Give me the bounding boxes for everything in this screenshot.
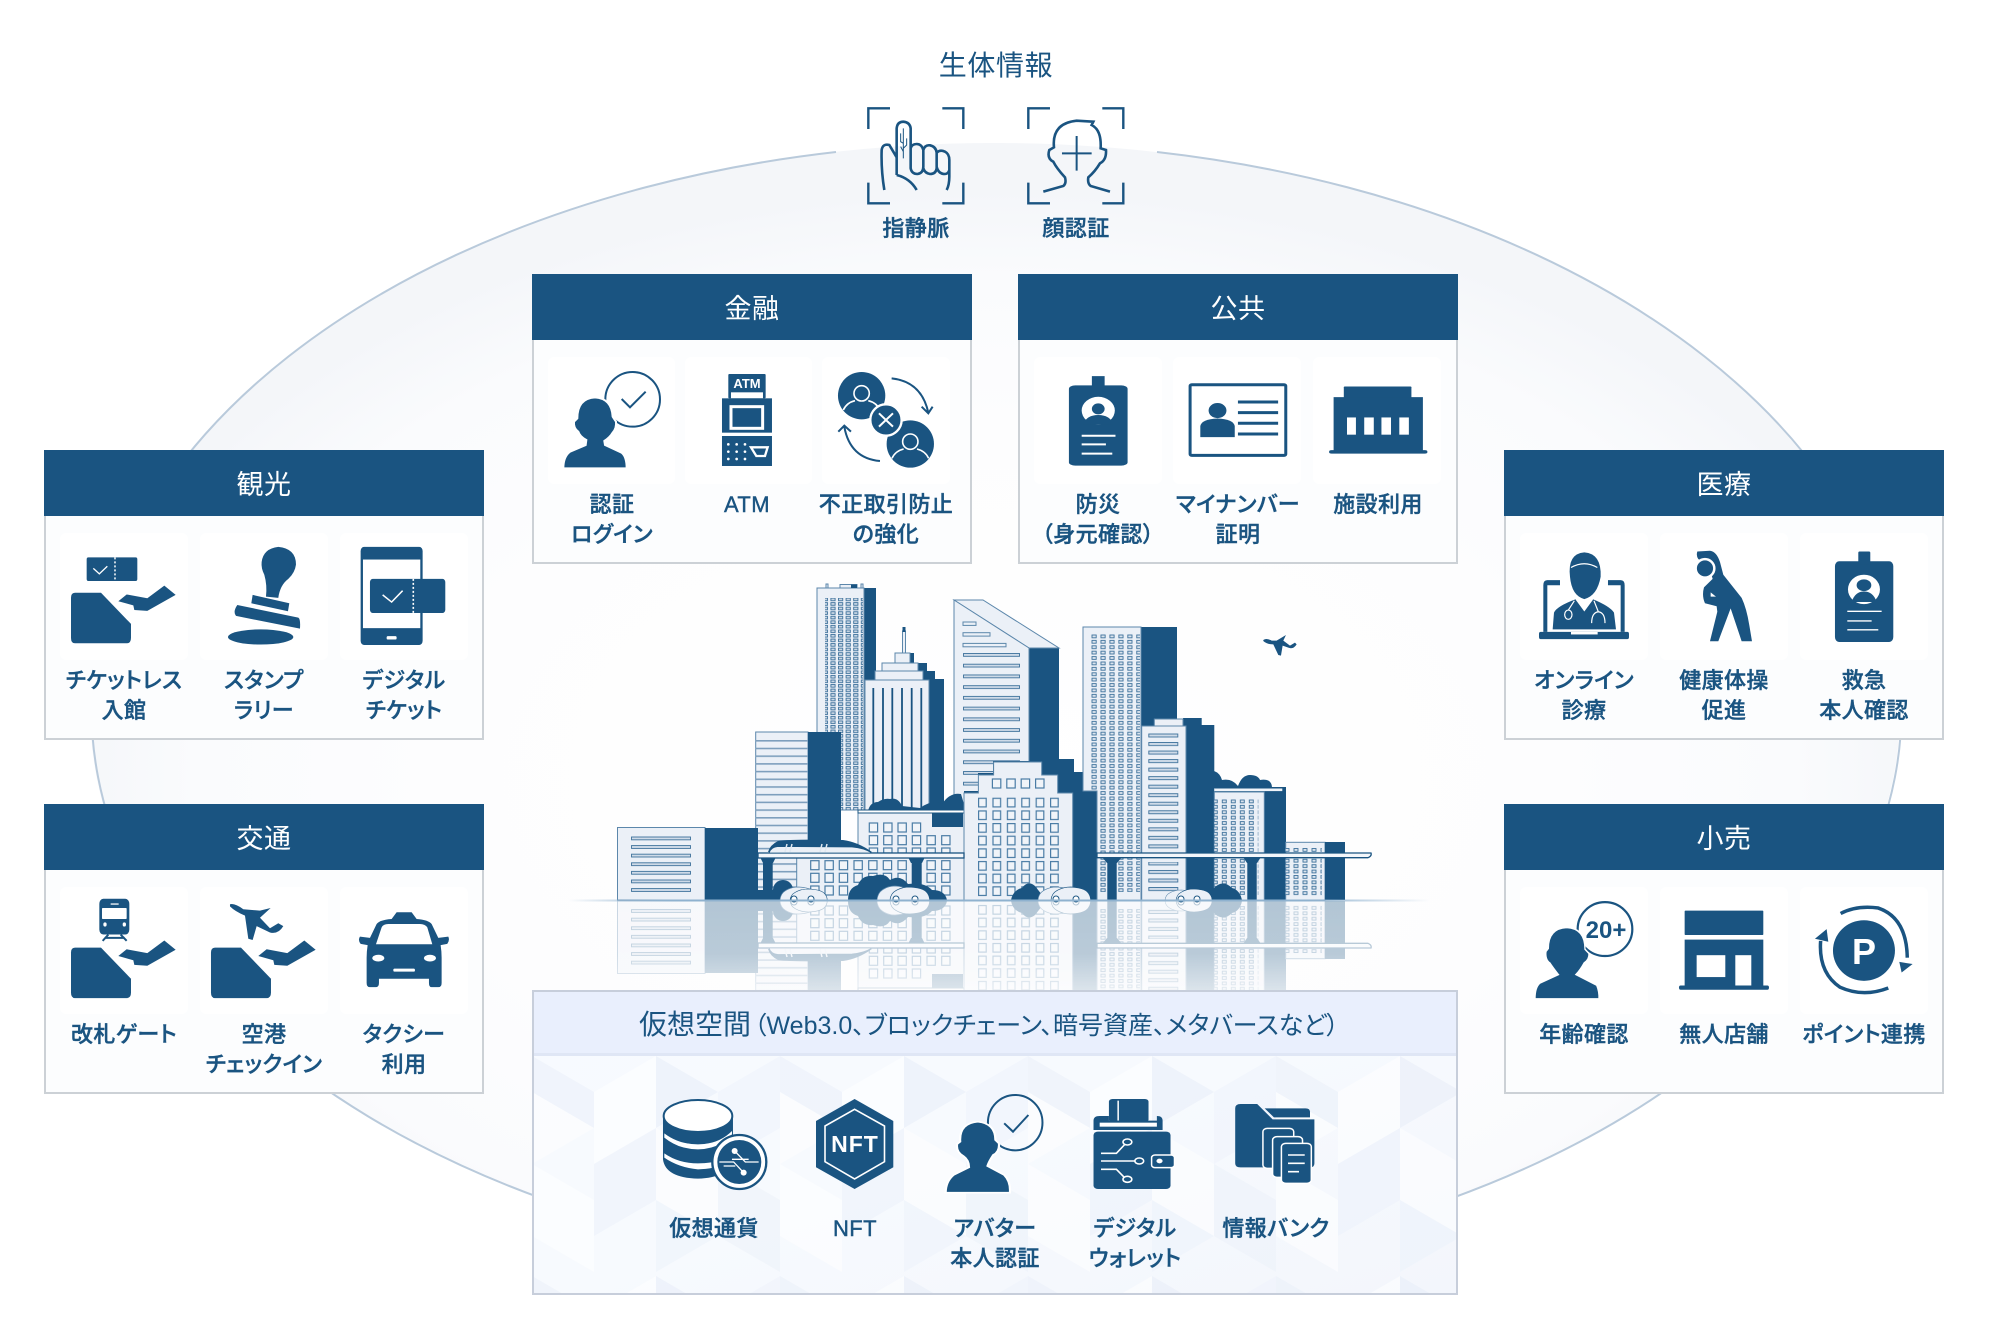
icon: auth login bbox=[563, 372, 660, 468]
icon: my number card bbox=[1190, 385, 1286, 455]
labels: transport: 空港 bbox=[242, 1022, 286, 1047]
heading: finance: 金融 bbox=[724, 294, 780, 324]
labels: public bbox=[1042, 492, 1423, 547]
labels: public: 証明 bbox=[1216, 522, 1260, 547]
labels: transport bbox=[71, 1022, 445, 1077]
labels: virtual space: 仮想通貨 bbox=[669, 1216, 759, 1241]
icon: digital wallet bbox=[1094, 1099, 1174, 1189]
labels: transport: タクシー bbox=[363, 1022, 445, 1047]
labels: finance: 認証 bbox=[590, 492, 634, 517]
labels: virtual space: 本人認証 bbox=[950, 1246, 1040, 1271]
labels: tourism: チケットレス bbox=[66, 668, 182, 693]
icon: online consultation bbox=[1539, 552, 1629, 639]
panel: finance bbox=[532, 274, 972, 563]
heading: tourism: 観光 bbox=[236, 470, 292, 500]
labels: public: 施設利用 bbox=[1333, 492, 1423, 517]
labels: transport: チェックイン bbox=[206, 1052, 322, 1077]
heading: medical: 医療 bbox=[1696, 470, 1752, 500]
labels: finance: 不正取引防止 bbox=[819, 492, 953, 517]
labels: tourism: 入館 bbox=[102, 698, 146, 723]
labels: tourism: チケット bbox=[366, 698, 442, 723]
panel: public bbox=[1018, 274, 1458, 563]
labels: public: 防災 bbox=[1076, 492, 1120, 517]
labels: medical bbox=[1534, 668, 1909, 723]
icon: airport check-in bbox=[211, 904, 316, 998]
icon: airplane bbox=[1263, 635, 1297, 656]
labels: tourism: ラリー bbox=[234, 698, 294, 723]
icon: age check: 20+ bbox=[1586, 917, 1626, 944]
labels: virtual space: デジタル bbox=[1093, 1216, 1177, 1241]
labels: tourism: スタンプ bbox=[224, 668, 304, 693]
icon: face recognition bbox=[1028, 108, 1123, 203]
icon: fraud prevention bbox=[838, 372, 934, 468]
icon: age check bbox=[1535, 902, 1632, 999]
heading: virtual space: 仮想空間（Web3.0、ブロックチェーン、暗号資産、メタバースなど） bbox=[639, 1009, 1339, 1040]
icon: avatar verification bbox=[946, 1095, 1042, 1193]
icon: facility bbox=[1329, 386, 1427, 454]
labels: virtual space: アバター bbox=[954, 1216, 1036, 1241]
background ellipse bbox=[90, 143, 1901, 1275]
label: finger vein: 指静脈 bbox=[882, 216, 950, 241]
icon: digital ticket bbox=[361, 547, 445, 645]
labels: public: （身元確認） bbox=[1042, 522, 1154, 547]
labels: tourism bbox=[66, 668, 446, 723]
heading: retail: 小売 bbox=[1696, 824, 1752, 854]
icon: NFT bbox=[816, 1099, 893, 1189]
label: face recognition: 顔認証 bbox=[1042, 216, 1110, 241]
labels: finance: の強化 bbox=[853, 522, 919, 547]
labels: medical: 健康体操 bbox=[1679, 668, 1769, 693]
icon: taxi bbox=[359, 912, 449, 987]
city illustration bbox=[568, 584, 1430, 1217]
panel: medical bbox=[1504, 450, 1944, 739]
labels: medical: 診療 bbox=[1562, 698, 1606, 723]
labels: retail: ポイント連携 bbox=[1802, 1022, 1926, 1047]
labels: virtual space bbox=[669, 1216, 1330, 1271]
icon: disaster badge bbox=[1069, 376, 1128, 466]
labels: finance: ログイン bbox=[571, 522, 653, 547]
ground line bbox=[568, 900, 1430, 902]
city skyline bbox=[618, 584, 1371, 902]
icon: ATM: ATM bbox=[733, 376, 761, 391]
heading: transport: 交通 bbox=[236, 824, 292, 854]
labels: finance: ATM bbox=[724, 492, 770, 517]
icon: stamp rally bbox=[228, 547, 300, 645]
icon: NFT: NFT bbox=[831, 1131, 879, 1157]
labels: medical: 本人確認 bbox=[1819, 698, 1909, 723]
labels: public: マイナンバー bbox=[1176, 492, 1300, 517]
panel: transport bbox=[44, 804, 484, 1093]
labels: finance bbox=[571, 492, 953, 547]
labels: medical: オンライン bbox=[1534, 668, 1634, 693]
panel: retail bbox=[1504, 804, 1944, 1093]
icon: finger vein bbox=[868, 108, 963, 203]
labels: retail: 年齢確認 bbox=[1539, 1022, 1629, 1047]
icon: points link bbox=[1815, 907, 1913, 993]
panel: virtual space bbox=[533, 991, 1457, 1294]
icon: unmanned store bbox=[1679, 911, 1769, 990]
heading: public: 公共 bbox=[1210, 294, 1266, 324]
icon: health exercise bbox=[1696, 551, 1752, 641]
icon: ticketless entry bbox=[71, 557, 176, 643]
labels: tourism: デジタル bbox=[362, 668, 446, 693]
icon: emergency badge bbox=[1835, 552, 1893, 642]
labels: medical: 救急 bbox=[1842, 668, 1886, 693]
labels: virtual space: NFT bbox=[833, 1216, 877, 1241]
labels: transport: 利用 bbox=[382, 1052, 426, 1077]
labels: virtual space: ウォレット bbox=[1089, 1246, 1181, 1271]
labels: virtual space: 情報バンク bbox=[1222, 1216, 1330, 1241]
icon: ATM bbox=[722, 374, 772, 466]
icon: ticket gate bbox=[71, 899, 176, 998]
title: biometrics: 生体情報 bbox=[939, 50, 1053, 81]
icon: virtual currency bbox=[663, 1100, 766, 1189]
labels: retail bbox=[1539, 1022, 1926, 1047]
labels: retail: 無人店舗 bbox=[1679, 1022, 1769, 1047]
panel: tourism bbox=[44, 450, 484, 739]
labels: medical: 促進 bbox=[1702, 698, 1746, 723]
icon: information bank bbox=[1235, 1104, 1314, 1183]
labels: transport: 改札ゲート bbox=[71, 1022, 177, 1047]
city reflection bbox=[617, 900, 1372, 990]
icon: points link: P bbox=[1852, 931, 1876, 972]
